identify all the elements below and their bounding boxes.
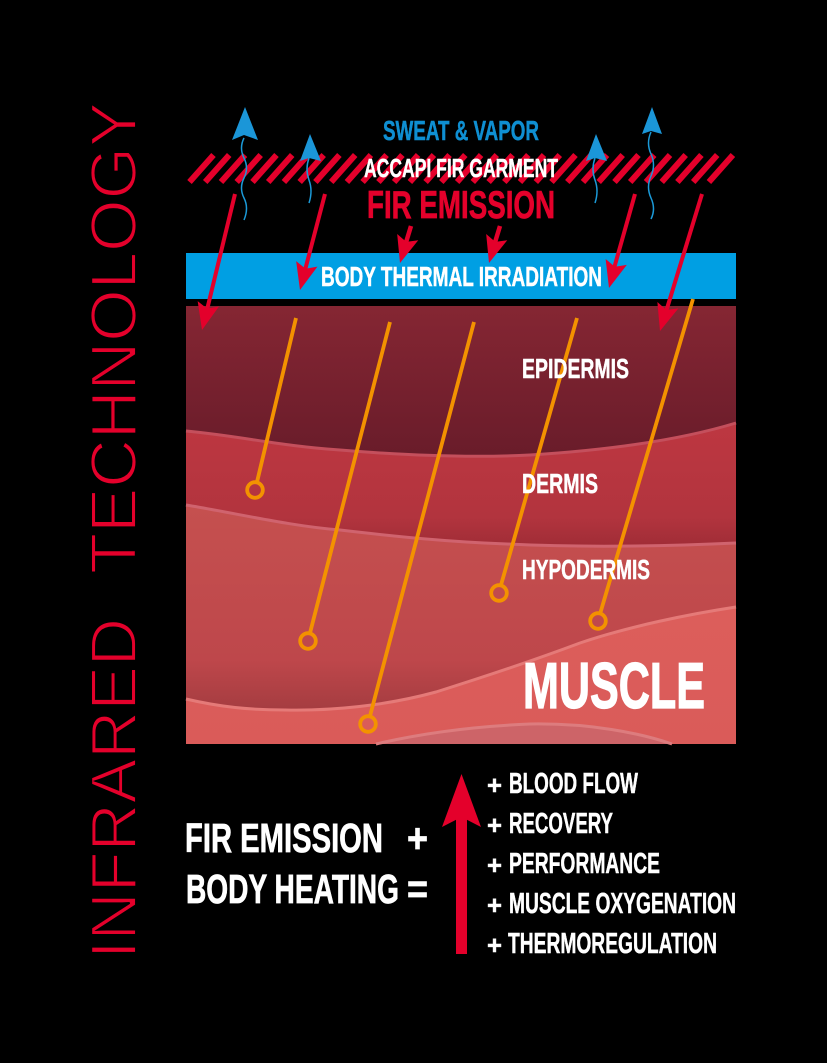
- orange penetration lines with end markers: [247, 299, 693, 732]
- arrow: far left: [191, 194, 235, 333]
- equation text: BODY HEATING: [186, 866, 399, 912]
- label: hypodermis: HYPODERMIS: [522, 554, 650, 585]
- benefits list: +: [487, 810, 502, 840]
- equation text: =: [407, 866, 428, 912]
- big upward arrow: [442, 774, 481, 954]
- hatched garment band: [190, 155, 733, 182]
- arrow: far right: [649, 194, 702, 334]
- layer: deep muscle: [376, 724, 672, 744]
- layer: epidermis: [186, 306, 736, 744]
- layer: hypodermis: [186, 505, 736, 744]
- benefits list: +: [487, 930, 502, 960]
- vertical title: infrared technology: TECHNOLOGY: [77, 102, 150, 574]
- red emission arrows: [191, 194, 702, 334]
- label: epidermis: EPIDERMIS: [522, 353, 629, 384]
- benefits list: +: [487, 850, 502, 880]
- vertical title: infrared technology: INFRARED: [77, 618, 150, 959]
- arrow: short right: [478, 226, 507, 266]
- heading: accapi fir garment: ACCAPI FIR GARMENT: [364, 153, 558, 183]
- label: dermis: DERMIS: [522, 468, 598, 499]
- blue vapor arrows: [232, 107, 662, 220]
- vertical title: infrared technology: [77, 102, 150, 959]
- benefits list: PERFORMANCE: [509, 848, 660, 880]
- label: muscle: MUSCLE: [523, 649, 705, 722]
- arrow: inner left: [289, 194, 325, 293]
- icon: vapor arrow 2: [300, 134, 321, 203]
- equation text: FIR EMISSION: [185, 815, 383, 861]
- heading: sweat and vapor: SWEAT & VAPOR: [383, 115, 539, 146]
- arrow: short left: [389, 226, 418, 266]
- benefits list: BLOOD FLOW: [509, 768, 638, 800]
- equation text: +: [407, 815, 428, 861]
- layer boundary highlights: [186, 423, 736, 744]
- icon: vapor arrow 1: [232, 107, 258, 220]
- layer: dermis: [186, 423, 736, 744]
- blue band: body thermal irradiation: [186, 253, 736, 299]
- icon: vapor arrow 4: [642, 107, 662, 219]
- equation text: [185, 815, 428, 912]
- benefits list: [487, 768, 736, 960]
- layer: muscle: [186, 607, 736, 744]
- benefits list: RECOVERY: [509, 808, 613, 840]
- benefits list: +: [487, 890, 502, 920]
- benefits list: +: [487, 770, 502, 800]
- benefits list: THERMOREGULATION: [508, 928, 717, 960]
- label: body thermal irradiation: BODY THERMAL IRRADIATION: [321, 261, 602, 292]
- arrow: inner right: [598, 194, 635, 291]
- skin layers diagram: [186, 306, 736, 744]
- heading: fir emission: FIR EMISSION: [367, 184, 555, 227]
- icon: vapor arrow 3: [586, 134, 607, 203]
